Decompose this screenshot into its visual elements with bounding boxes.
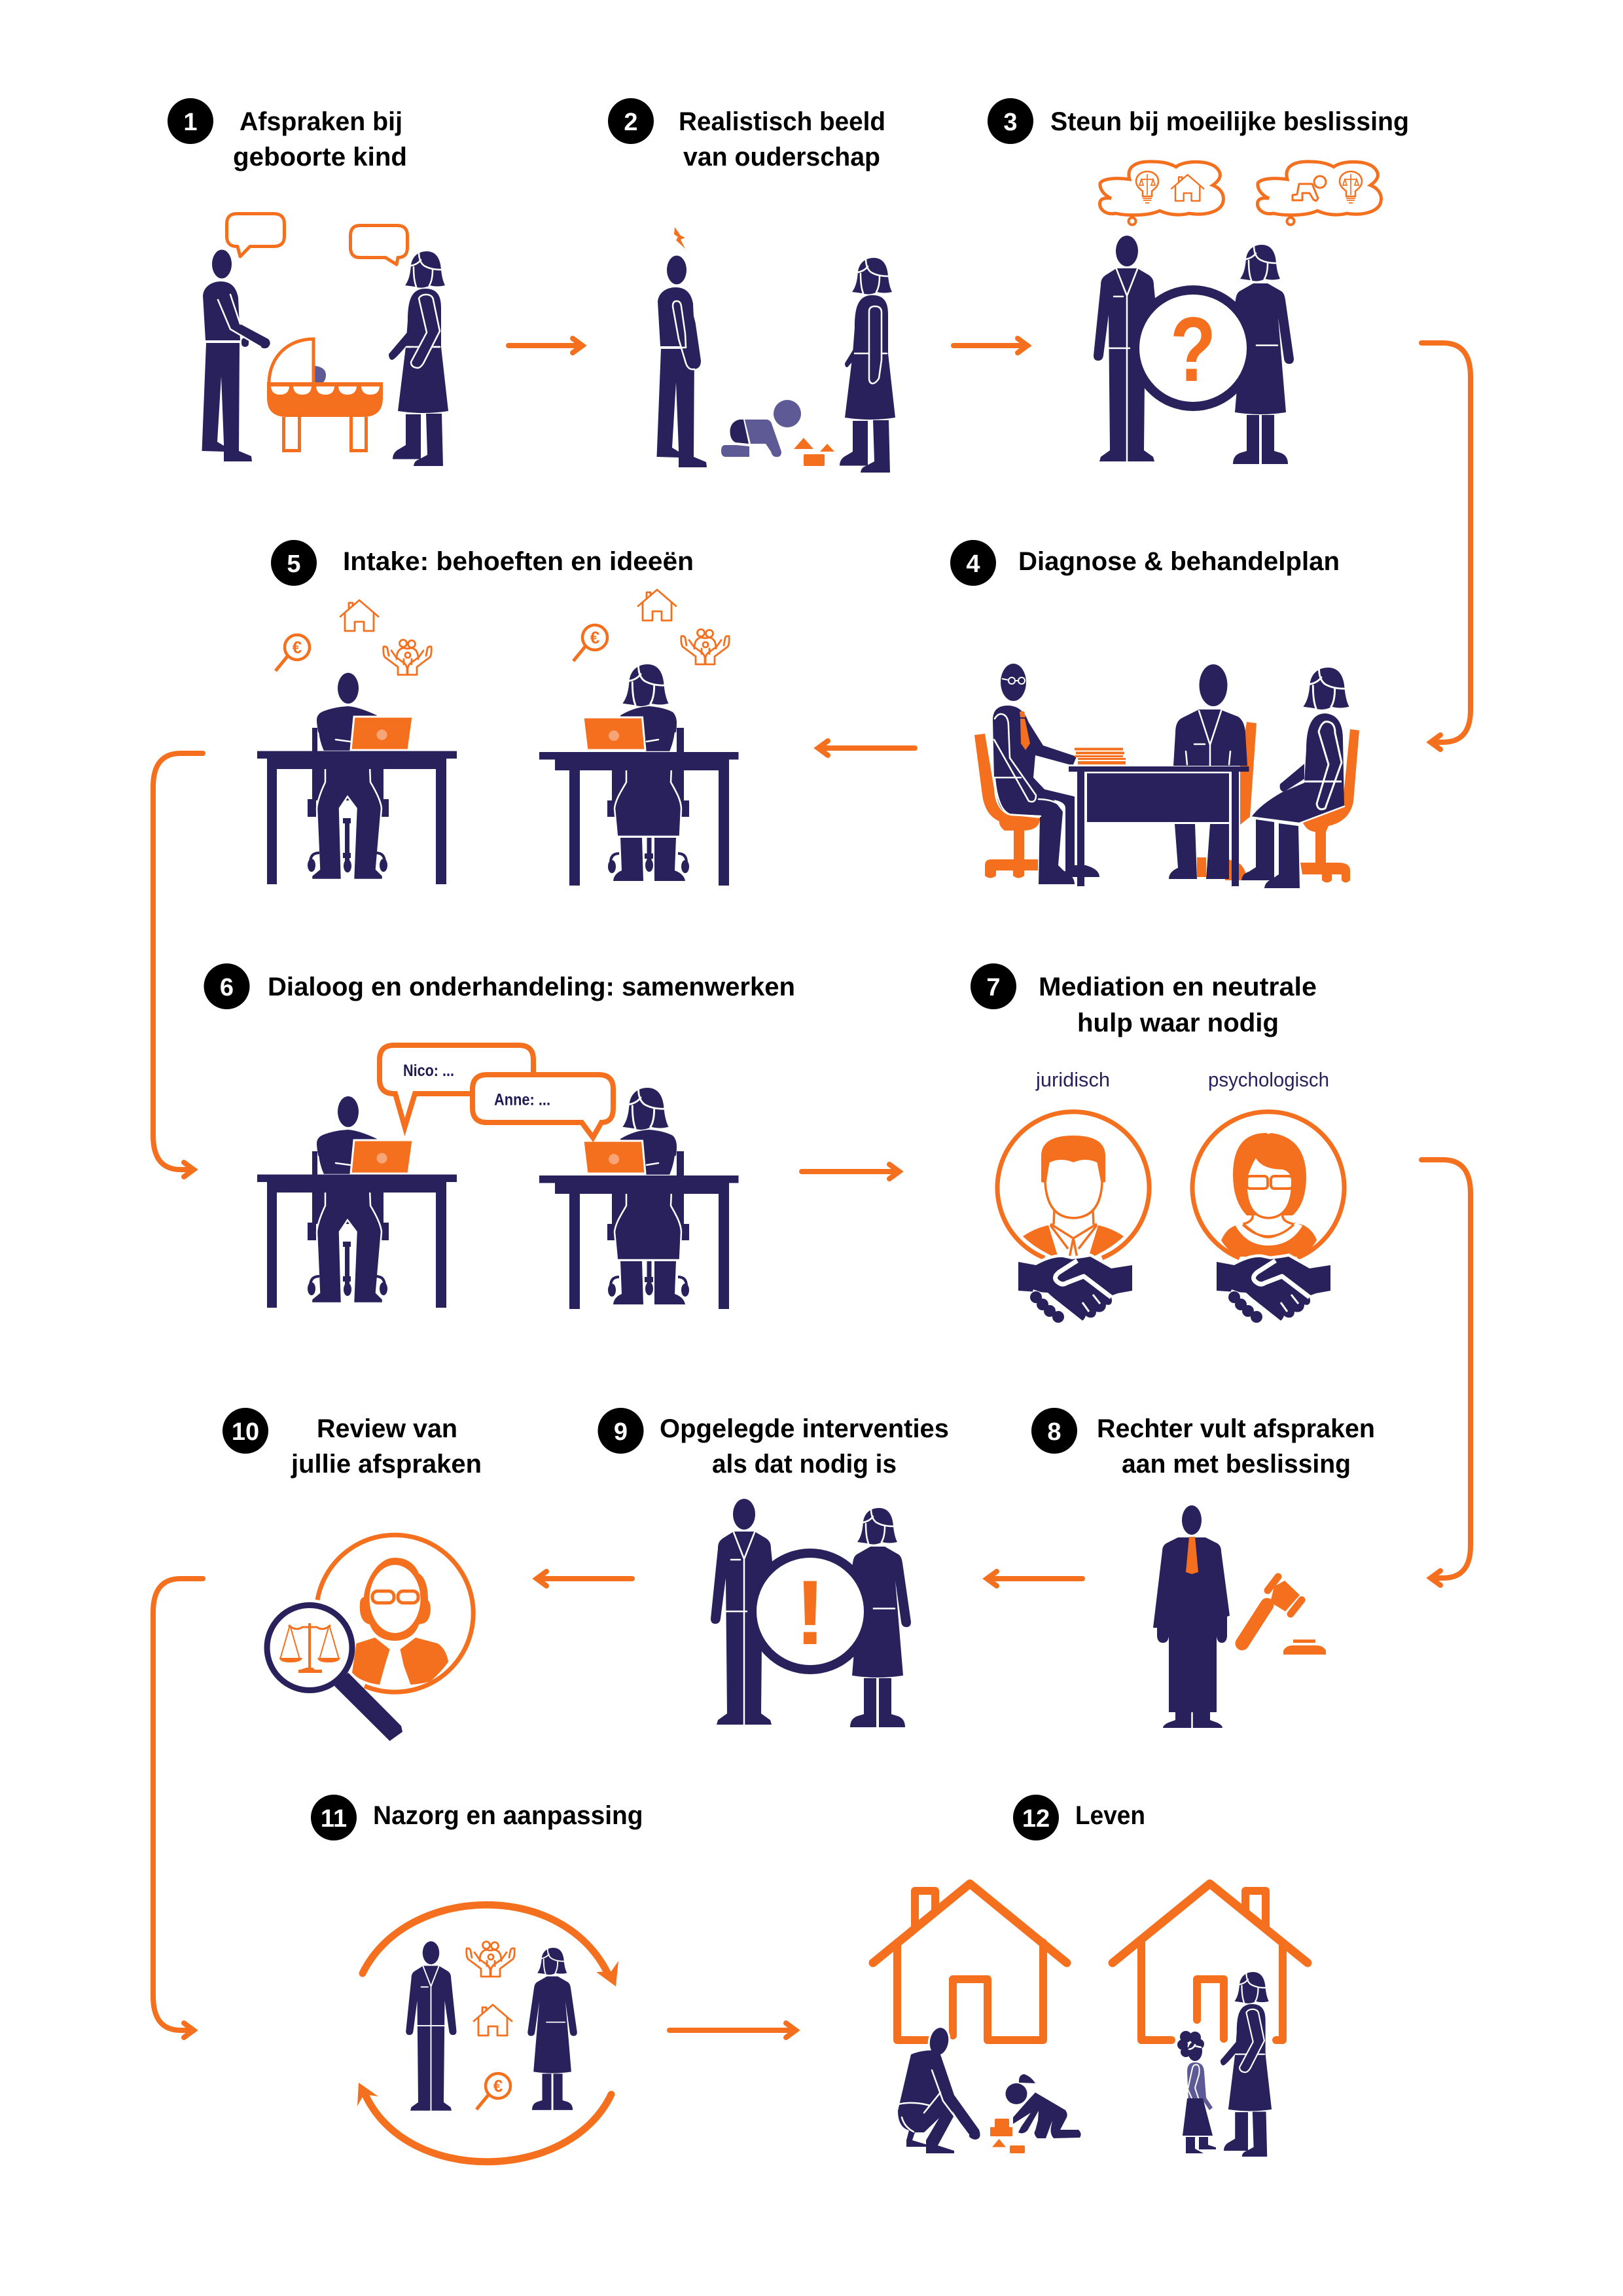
question ring: ? <box>1170 298 1216 401</box>
thought cloud left <box>1099 162 1223 225</box>
stack of books <box>1075 747 1126 764</box>
heading 8: aan met beslissing <box>1122 1450 1351 1479</box>
speech bubble left <box>226 213 284 257</box>
speech bubble Nico <box>380 1045 533 1127</box>
heading 1 <box>233 107 407 171</box>
man <box>406 1941 457 2111</box>
curved arrow 7 to 8 <box>1421 1160 1471 1585</box>
arrow 8 to 9 <box>987 1571 1082 1586</box>
blocks <box>990 2119 1025 2153</box>
heading 8 <box>1097 1414 1375 1479</box>
advisor with glasses <box>993 664 1099 884</box>
man <box>202 250 270 461</box>
arrow 6 to 7 <box>802 1164 899 1179</box>
woman <box>840 258 895 473</box>
badge 9: 9 <box>614 1418 628 1446</box>
heading 9: als dat nodig is <box>712 1450 897 1479</box>
badge 8 <box>1031 1408 1077 1454</box>
heading 1: geboorte kind <box>233 143 407 171</box>
gavel <box>1242 1577 1326 1655</box>
heading 7 <box>1039 973 1317 1037</box>
heading 10: jullie afspraken <box>291 1450 482 1479</box>
speech bubble Anne: Anne: ... <box>494 1090 550 1109</box>
badge 6 <box>204 963 250 1009</box>
cycle arrow top <box>363 1905 618 1986</box>
badge 12: 12 <box>1022 1805 1050 1833</box>
heading 12: Leven <box>1075 1801 1145 1830</box>
woman at desk <box>539 1088 738 1309</box>
badge 12 <box>1013 1795 1059 1840</box>
seated man centre <box>1169 664 1247 879</box>
step 4 <box>950 540 1359 888</box>
badge 5: 5 <box>287 550 301 578</box>
badge 11: 11 <box>321 1805 347 1833</box>
badge 7: 7 <box>986 974 1001 1001</box>
speech bubble right <box>351 225 407 264</box>
badge 8: 8 <box>1047 1418 1061 1446</box>
cycle arrow bottom <box>357 2083 611 2162</box>
arrow 9 to 10 <box>537 1571 632 1586</box>
portrait circle <box>317 1535 473 1692</box>
badge 3: 3 <box>1003 109 1018 136</box>
arrow 2 to 3 <box>954 338 1027 353</box>
man <box>711 1499 778 1725</box>
heading 8: Rechter vult afspraken <box>1097 1414 1375 1443</box>
portrait psychologisch <box>1192 1112 1344 1323</box>
crawling child <box>1005 2074 1081 2138</box>
judge <box>1153 1505 1230 1728</box>
arrow 1 to 2 <box>508 338 582 353</box>
arrow 11 to 12 <box>669 2023 796 2037</box>
man at desk <box>257 1096 457 1308</box>
woman <box>527 1948 577 2110</box>
heading 4: Diagnose & behandelplan <box>1018 547 1340 576</box>
heading 2: van ouderschap <box>683 143 880 171</box>
step 8 <box>1031 1408 1375 1728</box>
badge 1: 1 <box>183 109 198 136</box>
heading 1: Afspraken bij <box>240 107 402 136</box>
label juridisch: juridisch <box>1035 1068 1110 1091</box>
heading 11: Nazorg en aanpassing <box>373 1801 643 1830</box>
table <box>1069 766 1249 886</box>
man <box>657 255 707 467</box>
badge 11 <box>311 1795 357 1840</box>
crouching father <box>898 2026 980 2153</box>
exclamation ring <box>752 1553 868 1670</box>
chairs <box>974 722 1359 882</box>
curved arrow 3 to 4 <box>1421 343 1471 749</box>
badge 2: 2 <box>624 109 638 136</box>
step 11 <box>311 1795 643 2162</box>
woman <box>844 1508 911 1727</box>
heading 6: Dialoog en onderhandeling: samenwerken <box>268 973 795 1001</box>
woman <box>1227 245 1294 464</box>
badge 9 <box>598 1408 644 1454</box>
speech bubble Anne <box>473 1075 613 1138</box>
man at desk <box>257 673 457 884</box>
icons centre <box>467 1941 514 2109</box>
badge 6: 6 <box>220 974 234 1001</box>
house left <box>873 1884 1067 2040</box>
reviewer <box>352 1558 448 1685</box>
heading 9: Opgelegde interventies <box>660 1414 949 1443</box>
girl <box>1175 2029 1216 2153</box>
step 6 <box>204 963 795 1309</box>
heading 9 <box>660 1414 949 1479</box>
heading 2: Realistisch beeld <box>679 107 885 136</box>
arrow 4 to 5 <box>818 741 915 755</box>
mother <box>1221 1972 1272 2157</box>
heading 7: Mediation en neutrale <box>1039 973 1317 1001</box>
house right <box>1113 1884 1308 2040</box>
heading 3: Steun bij moeilijke beslissing <box>1050 107 1409 136</box>
badge 1 <box>168 98 213 144</box>
crib <box>267 339 383 450</box>
badge 4 <box>950 540 996 586</box>
icons left <box>276 600 431 675</box>
badge 4: 4 <box>966 550 980 578</box>
heading 10: Review van <box>317 1414 457 1443</box>
step 5 <box>257 540 738 886</box>
curved arrow 10 to 11 <box>153 1579 203 2037</box>
badge 10: 10 <box>232 1418 259 1446</box>
question ring <box>1135 290 1251 406</box>
badge 2 <box>608 98 654 144</box>
thought cloud right <box>1257 162 1381 225</box>
man <box>1094 236 1161 461</box>
badge 7 <box>971 963 1016 1009</box>
badge 3 <box>988 98 1033 144</box>
blocks <box>794 438 834 466</box>
icon: lightning <box>674 227 685 249</box>
step 10 <box>223 1408 482 1741</box>
label psychologisch: psychologisch <box>1208 1068 1329 1091</box>
step 12 <box>873 1795 1308 2157</box>
step 9 <box>598 1408 949 1727</box>
badge 5 <box>271 540 317 586</box>
step 1 <box>168 98 448 466</box>
heading 5: Intake: behoeften en ideeën <box>343 547 694 576</box>
portrait juridisch <box>997 1112 1149 1323</box>
heading 10 <box>291 1414 482 1479</box>
woman <box>389 251 448 466</box>
step 3 <box>988 98 1409 464</box>
exclamation ring: ! <box>795 1561 825 1664</box>
step 2 <box>608 98 895 473</box>
seated woman right <box>1241 664 1349 888</box>
heading 2 <box>679 107 885 171</box>
badge 10 <box>223 1408 268 1454</box>
icons right <box>573 590 729 664</box>
crawling baby <box>721 400 801 457</box>
speech bubble Nico: Nico: ... <box>403 1062 454 1080</box>
woman at desk <box>539 664 738 886</box>
heading 7: hulp waar nodig <box>1077 1009 1279 1037</box>
step 7 <box>971 963 1344 1323</box>
curved arrow 5 to 6 <box>153 753 203 1177</box>
magnifier with scales <box>267 1605 402 1741</box>
